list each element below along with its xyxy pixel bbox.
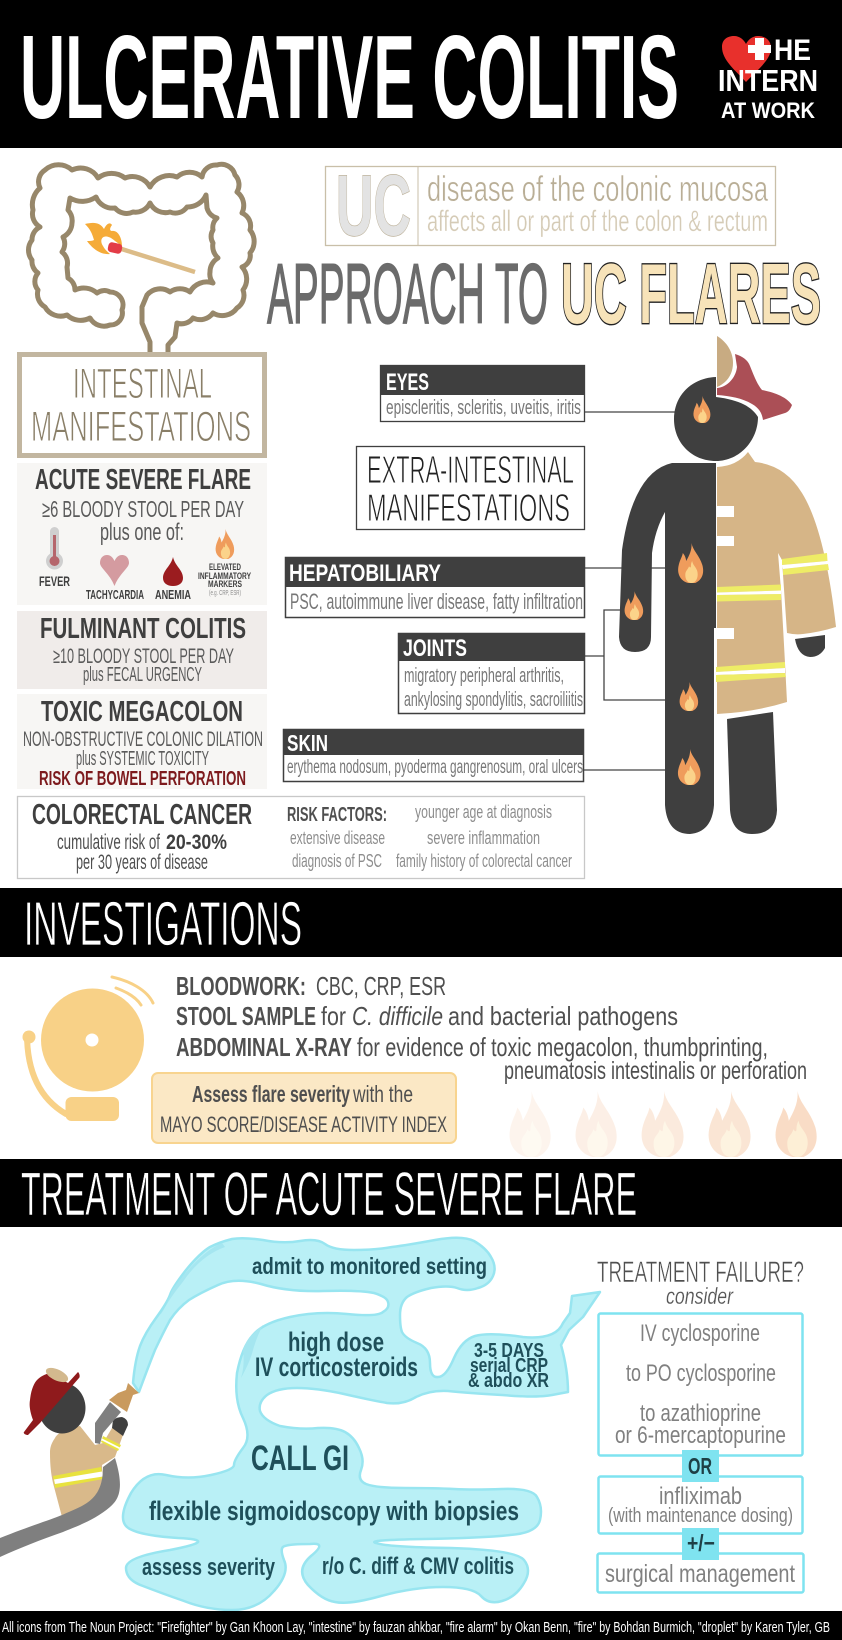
panel: colorectal cancer: severe inflammation xyxy=(427,828,540,848)
label: hepatobiliary: PSC, autoimmune liver disease, fatty infiltration xyxy=(290,589,583,614)
helmet xyxy=(717,336,792,420)
nozzle xyxy=(95,1402,121,1444)
logo: the intern at work: AT WORK xyxy=(721,98,815,123)
text block: treatment steps: & abdo XR xyxy=(468,1370,549,1392)
panel: intestinal manifestations heading: MANIFESTATIONS xyxy=(31,403,251,451)
head xyxy=(674,377,758,461)
text block: treatment steps: 3-5 DAYS xyxy=(474,1340,544,1362)
label: anemia: ANEMIA xyxy=(155,587,191,602)
label: skin xyxy=(283,729,584,782)
text block: investigations list xyxy=(176,971,807,1085)
label: elevated inflammatory markers: MARKERS xyxy=(208,579,242,589)
heading: extra-intestinal manifestations: MANIFESTATIONS xyxy=(367,487,570,530)
panel: colorectal cancer: family history of colorectal cancer xyxy=(396,851,572,871)
panel: acute severe flare: plus one of: xyxy=(100,519,184,546)
hose xyxy=(0,1458,120,1557)
heading: extra-intestinal manifestations xyxy=(356,446,584,530)
logo: the intern at work xyxy=(718,34,818,123)
label: joints: ankylosing spondylitis, sacroiliitis xyxy=(404,689,583,711)
text block: treatment steps: r/o C. diff & CMV colitis xyxy=(322,1553,514,1580)
box: infliximab xyxy=(598,1476,802,1534)
trouser leg xyxy=(727,712,777,834)
panel: toxic megacolon: RISK OF BOWEL PERFORATION xyxy=(39,768,246,790)
panel: acute severe flare: ACUTE SEVERE FLARE xyxy=(35,464,251,496)
panel: colorectal cancer: COLORECTAL CANCER xyxy=(32,799,252,831)
text block: treatment steps: CALL GI xyxy=(251,1439,349,1478)
panel: treatment failure: consider xyxy=(666,1283,734,1309)
label: elevated inflammatory markers: (e.g. CRP, ESR) xyxy=(209,590,241,597)
box: surgical management xyxy=(598,1554,804,1592)
icon: droplet xyxy=(163,557,183,586)
panel: toxic megacolon: plus SYSTEMIC TOXICITY xyxy=(76,748,209,770)
connector: plus minus xyxy=(682,1528,719,1560)
text block: treatment steps: flexible sigmoidoscopy with biopsies xyxy=(149,1496,519,1526)
text block: investigations list: ABDOMINAL X-RAY xyxy=(176,1032,352,1062)
callout: assess flare severity: MAYO SCORE/DISEASE ACTIVITY INDEX xyxy=(160,1112,447,1137)
panel: acute severe flare xyxy=(17,463,267,605)
text block: treatment steps: IV corticosteroids xyxy=(255,1352,418,1382)
box: infliximab: infliximab xyxy=(659,1483,742,1510)
label: hepatobiliary xyxy=(285,557,585,618)
label: joints: JOINTS xyxy=(403,635,467,662)
header band xyxy=(0,0,842,148)
connector: plus minus: +/− xyxy=(687,1530,715,1556)
intro box: UC definition: UC xyxy=(336,158,411,254)
panel: colorectal cancer: RISK FACTORS: xyxy=(287,804,387,826)
box: cyclosporine pathway xyxy=(598,1314,802,1456)
label: elevated inflammatory markers: ELEVATED xyxy=(209,562,241,572)
box: cyclosporine pathway: to PO cyclosporine xyxy=(626,1360,776,1387)
panel: fulminant colitis: FULMINANT COLITIS xyxy=(40,613,246,645)
icon: flame xyxy=(216,529,234,559)
text block: investigations list: and bacterial pathogens xyxy=(448,1001,678,1031)
label: tachycardia: TACHYCARDIA xyxy=(86,587,144,602)
callout: assess flare severity: Assess flare severity xyxy=(192,1081,350,1107)
section band: investigations xyxy=(0,888,842,959)
icon: thermometer xyxy=(46,527,63,570)
head xyxy=(38,1382,86,1434)
logo: the intern at work: INTERN xyxy=(718,63,818,98)
text block: investigations list: for xyxy=(321,1001,346,1031)
label: joints xyxy=(398,633,585,714)
label: eyes: episcleritis, scleritis, uveitis, iritis xyxy=(386,397,581,419)
helmet xyxy=(24,1372,80,1435)
panel: fulminant colitis: plus FECAL URGENCY xyxy=(83,664,202,686)
section band: investigations: INVESTIGATIONS xyxy=(24,890,302,959)
coat xyxy=(50,1426,123,1517)
label: eyes: EYES xyxy=(386,369,429,396)
text block: investigations list: C. difficile xyxy=(352,1001,443,1031)
intro box: UC definition xyxy=(326,158,776,254)
glove xyxy=(795,635,825,657)
icon: row of faded flames xyxy=(510,1091,817,1157)
panel: colorectal cancer: extensive disease xyxy=(290,828,385,848)
coat xyxy=(716,452,836,714)
panel: toxic megacolon: NON-OBSTRUCTIVE COLONIC DILATION xyxy=(23,728,263,751)
label: elevated inflammatory markers: INFLAMMATORY xyxy=(198,571,251,581)
callout: assess flare severity: with the xyxy=(352,1081,413,1107)
callout: assess flare severity xyxy=(152,1073,456,1143)
label: joints: migratory peripheral arthritis, xyxy=(404,665,564,687)
text block: treatment steps: serial CRP xyxy=(470,1355,548,1377)
icon: heart xyxy=(100,555,129,586)
connector: or xyxy=(682,1450,719,1482)
box: surgical management: surgical management xyxy=(605,1560,795,1588)
panel: toxic megacolon xyxy=(17,694,267,790)
label: hepatobiliary: HEPATOBILIARY xyxy=(289,560,441,587)
text block: treatment steps: admit to monitored setting xyxy=(252,1253,487,1279)
box: infliximab: (with maintenance dosing) xyxy=(608,1505,793,1527)
label: fever: FEVER xyxy=(39,573,70,589)
box: cyclosporine pathway: or 6-mercaptopurine xyxy=(615,1422,786,1449)
panel: intestinal manifestations heading: INTESTINAL xyxy=(73,360,212,408)
text block: treatment steps: assess severity xyxy=(142,1554,275,1581)
box: cyclosporine pathway: IV cyclosporine xyxy=(640,1320,760,1347)
icon: intestine with match xyxy=(28,164,254,353)
label: eyes xyxy=(380,365,585,422)
logo: the intern at work: HE xyxy=(774,34,811,67)
label: skin: erythema nodosum, pyoderma gangrenosum, oral ulcers xyxy=(287,757,583,778)
text block: investigations list: BLOODWORK: xyxy=(176,971,306,1001)
panel: colorectal cancer: per 30 years of disease xyxy=(76,851,208,874)
body bare half xyxy=(619,463,716,834)
panel: fulminant colitis: ≥10 BLOODY STOOL PER DAY xyxy=(53,645,234,668)
connector lines to firefighter xyxy=(584,412,676,770)
panel: fulminant colitis xyxy=(17,611,267,689)
icon: firefighter figure with flames xyxy=(619,336,836,834)
panel: colorectal cancer: 20-30% xyxy=(166,831,227,854)
footer credits xyxy=(0,1611,842,1640)
icon: fire alarm bell xyxy=(22,977,153,1121)
panel: intestinal manifestations heading xyxy=(20,354,264,456)
panel: colorectal cancer: younger age at diagnosis xyxy=(415,802,552,822)
panel: acute severe flare: ≥6 BLOODY STOOL PER DAY xyxy=(42,496,244,522)
text block: investigations list: STOOL SAMPLE xyxy=(176,1001,316,1031)
label: elevated inflammatory markers xyxy=(198,562,251,597)
glove xyxy=(112,1417,128,1436)
box: cyclosporine pathway: to azathioprine xyxy=(640,1400,761,1427)
icon: firefighter with hose xyxy=(0,1365,139,1557)
panel: colorectal cancer: cumulative risk of xyxy=(57,831,160,854)
text block: treatment steps: high dose xyxy=(288,1327,384,1357)
connector: or: OR xyxy=(688,1453,712,1479)
text block: investigations list: CBC, CRP, ESR xyxy=(316,971,446,1001)
text block: treatment steps xyxy=(142,1253,549,1581)
panel: treatment failure xyxy=(597,1256,804,1592)
heading: extra-intestinal manifestations: EXTRA-INTESTINAL xyxy=(367,449,574,492)
panel: colorectal cancer: diagnosis of PSC xyxy=(292,851,382,871)
panel: colorectal cancer xyxy=(18,796,584,878)
label: skin: SKIN xyxy=(287,730,328,756)
illustration: water stream xyxy=(123,1238,600,1610)
panel: toxic megacolon: TOXIC MEGACOLON xyxy=(41,696,243,728)
